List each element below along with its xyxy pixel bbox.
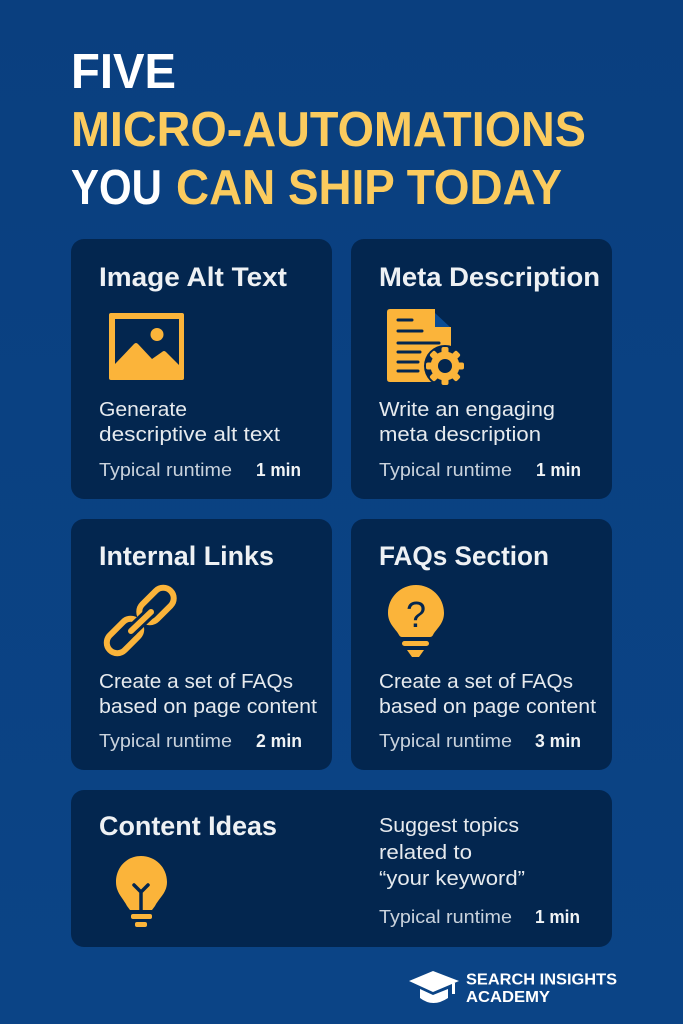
description	[379, 671, 596, 718]
description: Create a set of FAQs	[99, 671, 293, 693]
runtime: 2 min	[256, 731, 302, 751]
heading: faqs section: FAQs Section	[379, 541, 549, 571]
icon: document with gear	[387, 309, 466, 387]
title: FIVE	[71, 45, 176, 99]
description: based on page content	[379, 696, 596, 718]
description: descriptive alt text	[99, 424, 280, 446]
icon: picture	[109, 313, 184, 380]
runtime	[379, 731, 581, 751]
description	[379, 399, 555, 446]
title: MICRO-AUTOMATIONS	[71, 103, 586, 157]
title	[71, 45, 586, 215]
panel: image alt text	[71, 239, 332, 499]
icon: question bulb: ?	[406, 594, 426, 635]
logo: search insights academy: SEARCH INSIGHTS	[466, 972, 617, 988]
panel: faqs section	[351, 519, 612, 770]
heading: content ideas: Content Ideas	[99, 811, 277, 841]
runtime: 3 min	[535, 731, 581, 751]
description	[99, 671, 317, 718]
runtime: Typical runtime	[379, 907, 512, 927]
runtime	[99, 731, 302, 751]
description: based on page content	[99, 696, 317, 718]
title: CAN SHIP TODAY	[176, 161, 562, 215]
description	[99, 399, 280, 446]
runtime	[99, 460, 301, 480]
icon: question bulb	[388, 585, 444, 657]
icon: graduation cap	[409, 971, 459, 1003]
runtime: 1 min	[256, 460, 301, 480]
heading: image alt text: Image Alt Text	[99, 262, 287, 292]
runtime: Typical runtime	[379, 460, 512, 480]
description: Create a set of FAQs	[379, 671, 573, 693]
description: Suggest topics	[379, 815, 519, 837]
runtime	[379, 460, 581, 480]
description: Generate	[99, 399, 187, 421]
panel: content ideas	[71, 790, 612, 947]
panel: internal links	[71, 519, 332, 770]
runtime: Typical runtime	[99, 460, 232, 480]
description: “your keyword”	[379, 868, 525, 890]
title: YOU	[71, 161, 162, 215]
description: related to	[379, 842, 472, 864]
icon: chain link	[102, 583, 178, 658]
description: meta description	[379, 424, 541, 446]
heading: meta description: Meta Description	[379, 262, 600, 292]
description	[379, 815, 525, 890]
runtime: Typical runtime	[99, 731, 232, 751]
runtime	[379, 907, 580, 927]
heading: internal links: Internal Links	[99, 541, 274, 571]
runtime: Typical runtime	[379, 731, 512, 751]
runtime: 1 min	[536, 460, 581, 480]
logo: search insights academy	[409, 971, 617, 1006]
icon: light bulb	[116, 856, 167, 927]
logo: search insights academy: ACADEMY	[466, 989, 551, 1006]
runtime: 1 min	[535, 907, 580, 927]
description: Write an engaging	[379, 399, 555, 421]
panel: meta description	[351, 239, 612, 499]
